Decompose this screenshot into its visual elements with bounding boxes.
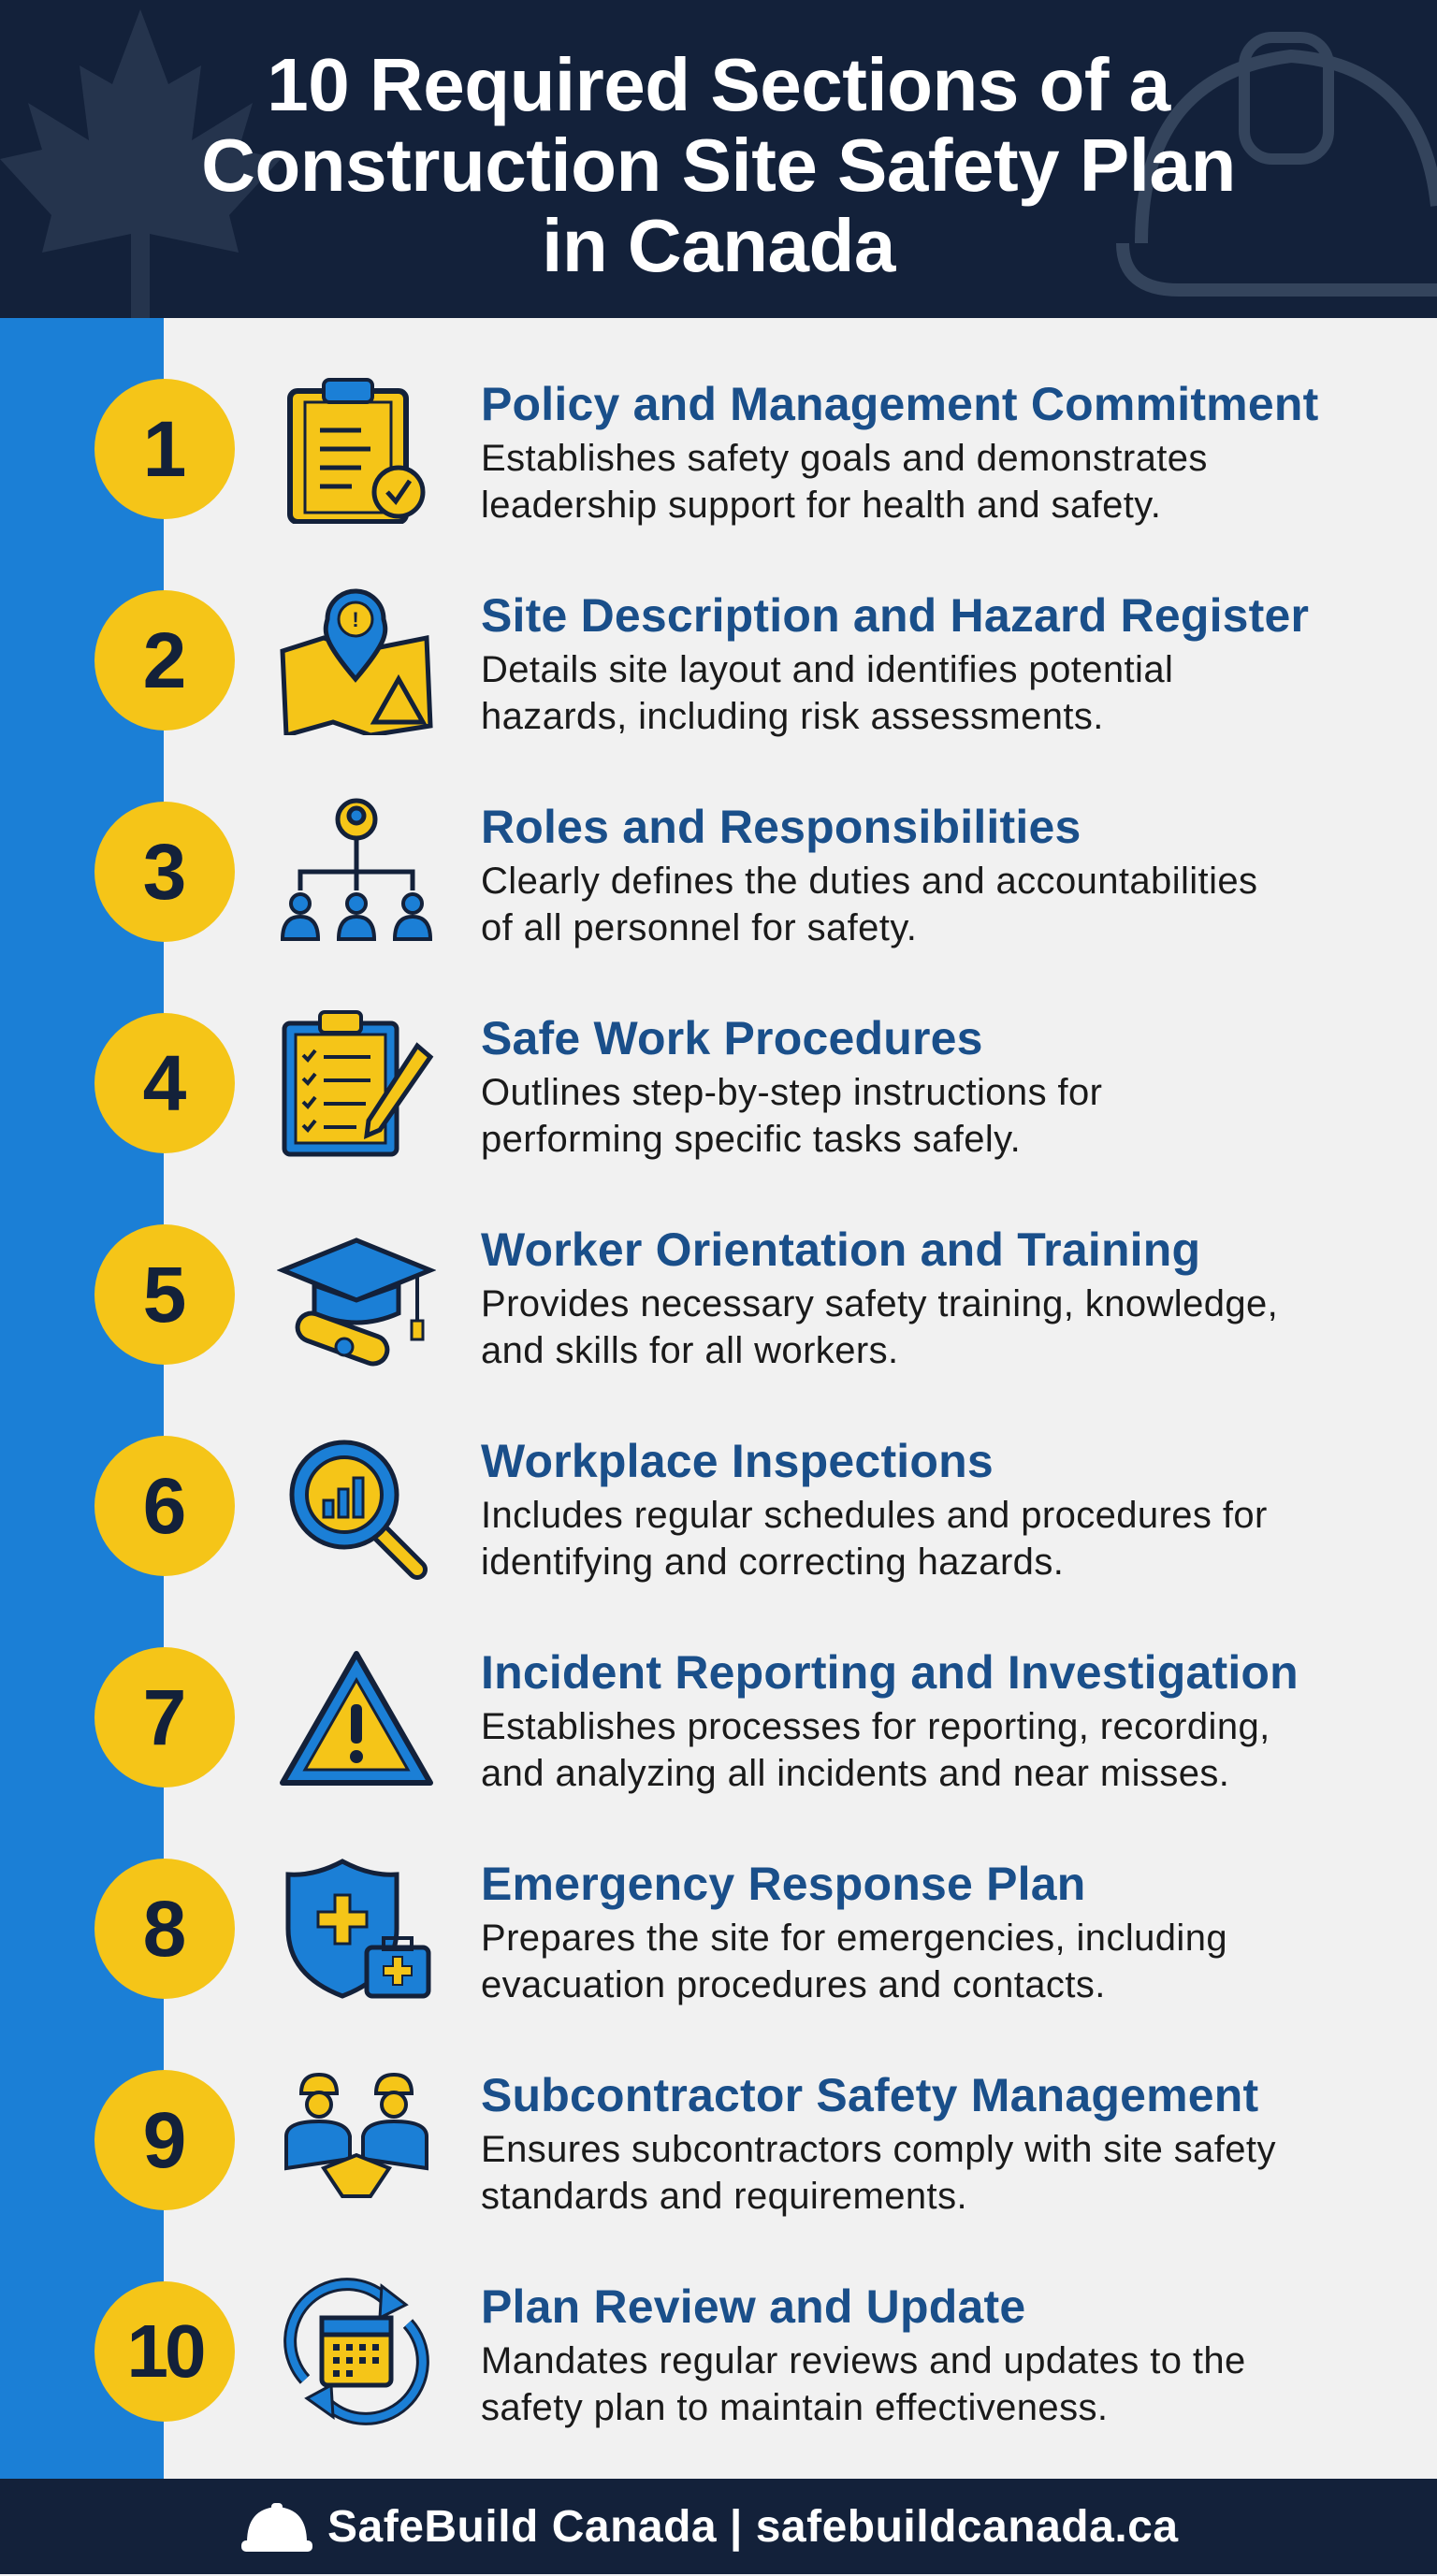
row 6: identifying and correcting hazards.	[481, 1541, 1064, 1583]
row 7	[94, 1646, 1299, 1794]
row 1: leadership support for health and safety.	[481, 485, 1161, 526]
row 5: 5	[143, 1251, 186, 1339]
row 1: 1	[143, 405, 186, 493]
title	[201, 43, 1236, 287]
title: in Canada	[542, 204, 895, 287]
row 4: 4	[143, 1039, 186, 1127]
row 2: 2	[143, 616, 186, 704]
row 4	[94, 1010, 1102, 1160]
icon: map with hazard pin	[280, 589, 433, 735]
icon: map with hazard pin: !	[352, 608, 359, 631]
row 7: 7	[143, 1673, 186, 1761]
row 3	[94, 799, 1257, 948]
row 4: Outlines step-by-step instructions for	[481, 1072, 1102, 1113]
row 7: Establishes processes for reporting, recording,	[481, 1706, 1270, 1747]
row 8: 8	[143, 1885, 186, 1973]
row 9	[94, 2069, 1276, 2217]
row 3: 3	[143, 828, 186, 916]
icon: maple leaf background	[0, 9, 281, 318]
row 8: Prepares the site for emergencies, including	[481, 1918, 1227, 1959]
title: 10 Required Sections of a	[267, 43, 1170, 126]
row 6: Includes regular schedules and procedures for	[481, 1495, 1268, 1536]
row 5: and skills for all workers.	[481, 1330, 898, 1371]
row 9: Subcontractor Safety Management	[481, 2069, 1258, 2121]
row 2: Site Description and Hazard Register	[481, 589, 1309, 642]
row 6: Workplace Inspections	[481, 1435, 994, 1487]
footer	[0, 2479, 1437, 2574]
icon: org chart	[281, 799, 432, 941]
row 3: of all personnel for safety.	[481, 907, 917, 948]
row 8: Emergency Response Plan	[481, 1858, 1086, 1910]
row 9: 9	[143, 2096, 186, 2184]
title: Construction Site Safety Plan	[201, 123, 1236, 207]
row 6: 6	[143, 1462, 186, 1550]
row 3: Clearly defines the duties and accountabilities	[481, 861, 1257, 902]
icon: magnifier	[290, 1440, 428, 1580]
icon: hard hat	[241, 2503, 312, 2552]
row 10: Plan Review and Update	[481, 2280, 1025, 2333]
row 8	[94, 1858, 1227, 2005]
footer text: SafeBuild Canada | safebuildcanada.ca	[327, 2502, 1179, 2552]
row 4: Safe Work Procedures	[481, 1012, 983, 1064]
row 5: Worker Orientation and Training	[481, 1223, 1200, 1276]
row 2: Details site layout and identifies potential	[481, 649, 1173, 690]
row 10	[94, 2278, 1246, 2428]
icon: workers handshake	[284, 2073, 428, 2198]
row 6	[94, 1435, 1268, 1583]
row 1	[94, 378, 1318, 526]
row 7: and analyzing all incidents and near misses.	[481, 1753, 1229, 1794]
icon: calendar with refresh arrows	[283, 2278, 429, 2425]
icon: hard hat background	[1116, 32, 1437, 297]
row 7: Incident Reporting and Investigation	[481, 1646, 1299, 1699]
row 10: 10	[127, 2309, 202, 2393]
row 2: hazards, including risk assessments.	[481, 696, 1104, 737]
row 5	[94, 1223, 1278, 1371]
icon: clipboard	[287, 378, 425, 524]
row 10: Mandates regular reviews and updates to the	[481, 2340, 1246, 2381]
row 9: Ensures subcontractors comply with site safety	[481, 2129, 1276, 2170]
icon: warning triangle	[280, 1651, 433, 1786]
row 8: evacuation procedures and contacts.	[481, 1964, 1106, 2005]
row 10: safety plan to maintain effectiveness.	[481, 2387, 1108, 2428]
row 1: Policy and Management Commitment	[481, 378, 1318, 430]
icon: checklist with pencil	[283, 1010, 434, 1156]
row 3: Roles and Responsibilities	[481, 801, 1081, 853]
row 1: Establishes safety goals and demonstrates	[481, 438, 1208, 479]
row 5: Provides necessary safety training, knowledge,	[481, 1283, 1278, 1324]
row 9: standards and requirements.	[481, 2176, 967, 2217]
header	[0, 0, 1437, 318]
icon: graduation cap	[277, 1237, 436, 1366]
icon: shield and first aid kit	[286, 1859, 430, 1999]
row 4: performing specific tasks safely.	[481, 1119, 1021, 1160]
row 2	[94, 589, 1309, 737]
